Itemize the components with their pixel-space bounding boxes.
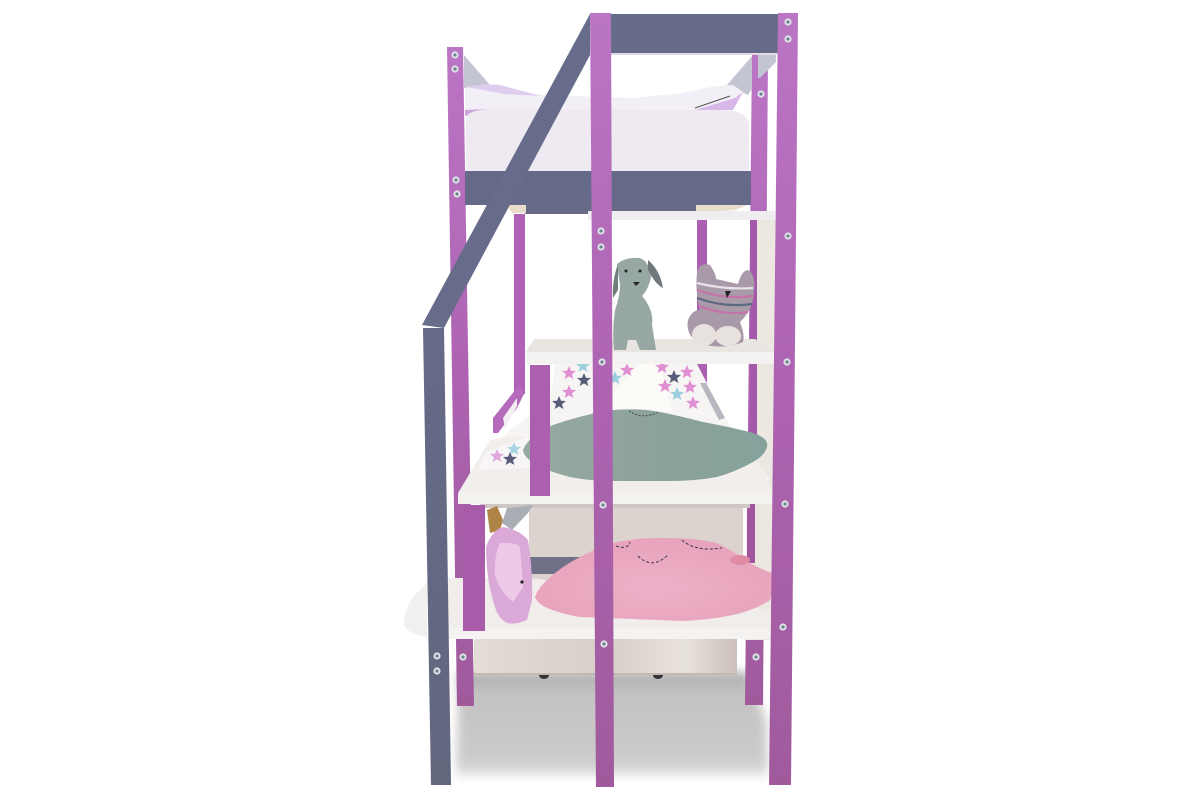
lower bunk rail opening — [503, 398, 517, 428]
lower bunk star bedding — [475, 359, 770, 490]
front short post upper — [530, 365, 550, 496]
small lower bunk rail — [493, 384, 524, 433]
shelf: fourth with step — [404, 578, 772, 639]
gusset triangles at upper bunk — [464, 55, 776, 95]
toy: grey rabbit — [613, 258, 663, 350]
handrail — [422, 14, 590, 785]
right cream side panel — [745, 220, 776, 640]
inner right post — [697, 218, 707, 408]
inner left post — [514, 214, 525, 394]
top grey bar — [611, 14, 778, 55]
back right post — [745, 55, 768, 705]
shelf: top — [588, 211, 775, 220]
upper bunk pillow and bedding — [465, 84, 743, 116]
toy: striped cat — [688, 264, 754, 347]
right post — [769, 13, 798, 785]
upper bed rail — [465, 171, 751, 214]
shelf: third — [458, 436, 774, 508]
back left post — [447, 47, 474, 706]
center post — [590, 13, 614, 787]
drawer under bed — [474, 639, 737, 679]
floor shadow — [456, 672, 768, 775]
front short post lower — [463, 505, 485, 631]
shelf: second — [526, 339, 774, 364]
lower bunk back panel — [529, 507, 743, 597]
toy: unicorn — [486, 505, 533, 624]
screws — [433, 18, 792, 675]
pink pillow — [535, 538, 773, 621]
green pillow — [523, 409, 767, 481]
upper mattress — [466, 109, 749, 171]
